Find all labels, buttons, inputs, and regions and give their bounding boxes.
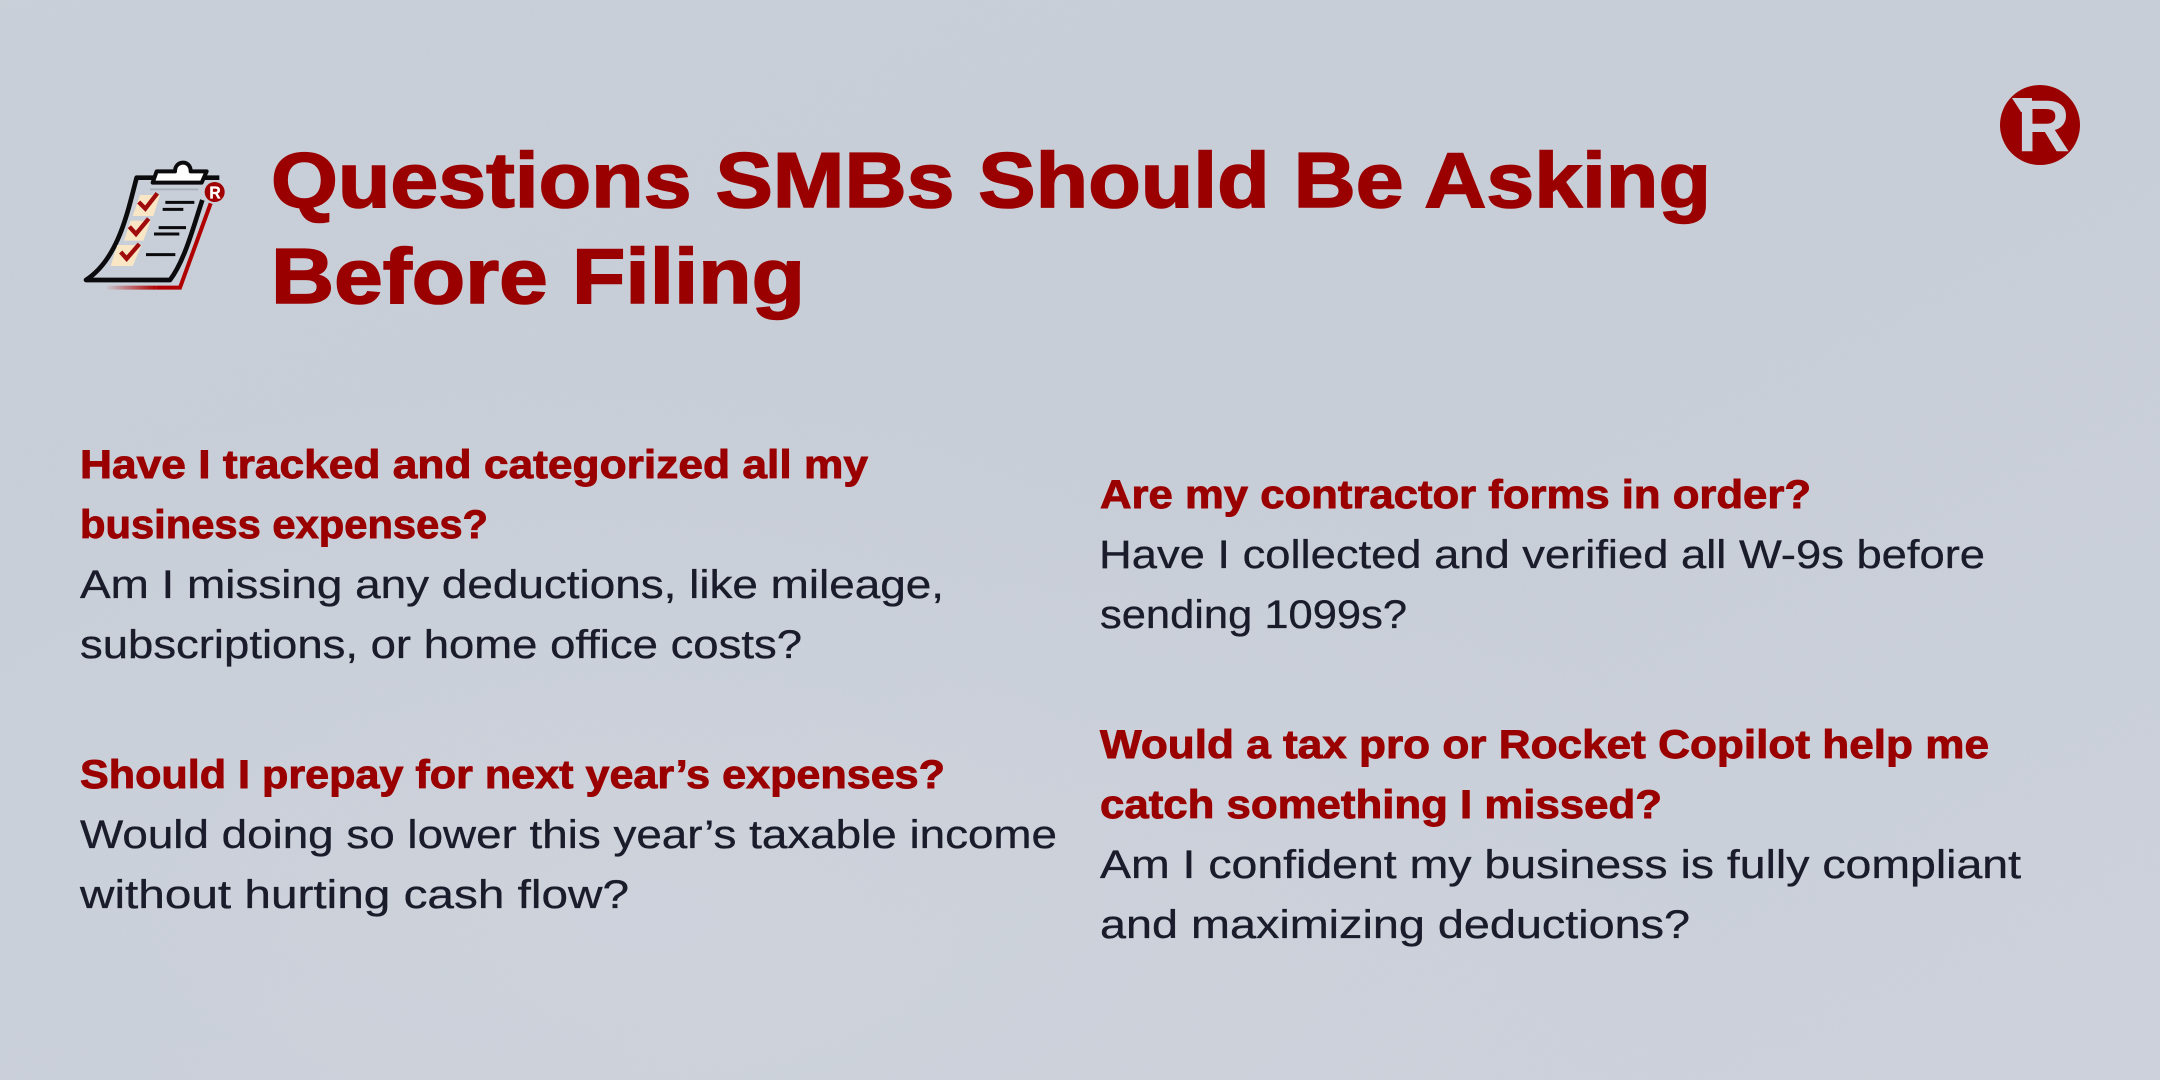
logo: R mark [2000,85,2080,167]
logo: R mark: R [2017,86,2070,167]
title: Before Filing [271,232,805,320]
clipboard sheet [86,178,219,280]
block: prepay question: Would doing so lower this year’s taxable income [80,813,1057,857]
block: tax pro question: Am I confident my business is fully compliant [1100,843,2021,887]
icon: clipboard checklist [86,163,225,288]
block: contractor forms question [1099,473,1985,637]
title [271,136,1711,320]
block: tracked expenses question: Have I tracked and categorized all my [80,443,869,487]
block: contractor forms question: Have I collected and verified all W-9s before [1099,533,1985,577]
block: prepay question: without hurting cash flow? [79,873,629,917]
block: tracked expenses question: subscriptions, or home office costs? [80,623,802,667]
block: tax pro question: and maximizing deductions? [1100,903,1690,947]
title: Questions SMBs Should Be Asking [271,136,1711,224]
block: tracked expenses question: business expenses? [80,503,488,547]
clip [153,163,207,183]
block: contractor forms question: Are my contractor forms in order? [1100,473,1811,517]
block: prepay question [79,753,1057,917]
badge [205,182,225,202]
red paper shadow [107,282,157,294]
block: contractor forms question: sending 1099s? [1100,593,1407,637]
icon: clipboard checklist: R [209,182,221,202]
block: tax pro question: Would a tax pro or Rocket Copilot help me [1100,723,1989,767]
block: tracked expenses question: Am I missing any deductions, like mileage, [80,563,944,607]
block: prepay question: Should I prepay for next year’s expenses? [80,753,945,797]
block: tax pro question [1100,723,2021,947]
checkbox rows [133,195,160,216]
block: tracked expenses question [80,443,944,667]
block: tax pro question: catch something I missed? [1100,783,1662,827]
